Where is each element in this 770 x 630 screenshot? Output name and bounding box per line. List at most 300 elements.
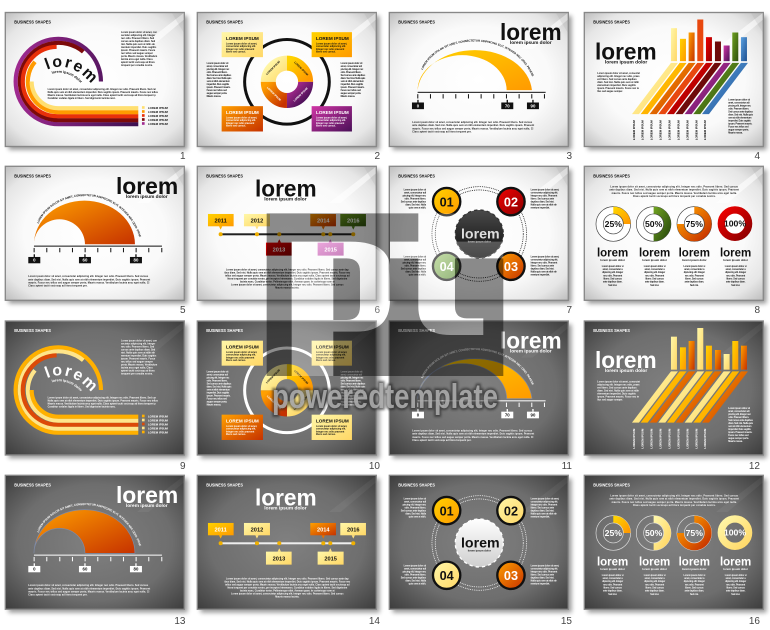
- right text block: ipsum. Praesent mauris.: [341, 394, 365, 397]
- text bottom left: piscing elit. Integer nec: [403, 570, 427, 573]
- box: top left: Integer nec odio praesent: [226, 356, 255, 359]
- text top left: diam. Sed nisi. Nulla: [405, 205, 427, 207]
- segment labels: LOREM IPSUM: [293, 86, 309, 102]
- text block: mauris. Fusce nec tellus sed augue semper porta. Mauris massa. Vestibulum lacinia arcu eget nulla. Cl: [28, 281, 150, 284]
- right text block: diam. Sed nisi. Nulla quis: [341, 78, 366, 80]
- text block: elementum imperdiet. Duis sagittis: [597, 84, 637, 87]
- column 2 text: libero. Sed cursus: [645, 278, 665, 280]
- text top left: odio. Praesent libero.: [404, 507, 426, 510]
- curved bands: [16, 347, 138, 433]
- text block: nec odio. Praesent libero. Sed: [121, 37, 155, 40]
- text bottom right: Lorem ipsum dolor sit amet,: [531, 255, 560, 258]
- left text block: amet, consectetur adi: [207, 373, 228, 376]
- year 2016: 2016: [347, 527, 360, 533]
- text block: lacinia arcu eget nulla. Class: [121, 367, 153, 370]
- segment labels: LOREM IPSUM: [266, 86, 283, 102]
- box: bottom right: Lorem ipsum dolor sit amet,: [316, 425, 347, 428]
- page numbers: 2: [374, 151, 380, 162]
- slide 6: timeline: [197, 166, 380, 304]
- column 3 text: dipiscing elit. Integer: [684, 271, 705, 274]
- right text block: odio. Praesent libero.: [728, 107, 750, 110]
- left text block: Lorem ipsum dolor sit: [207, 62, 229, 65]
- column 4 text: Lorem ipsum dolor si: [725, 266, 747, 268]
- lorem title: lorem ipsum dolor: [264, 506, 307, 511]
- column 1 text: libero. Sed cursus: [603, 278, 623, 280]
- year 2015: [318, 548, 344, 565]
- left text block: Mauris massa.: [207, 96, 221, 98]
- slide 2: cycle with boxes: [197, 12, 380, 150]
- intro text: mauris. Fusce nec tellus sed augue semper porta. Mauris massa. Vestibulum lacinia arcu eget nulla.: [612, 501, 737, 504]
- column 2 text: dipiscing elit. Integer: [644, 271, 665, 274]
- column 1 text: Sed nisi.: [608, 594, 617, 596]
- column 1 text: dipiscing elit. Integer: [602, 580, 623, 583]
- centre badge: [455, 519, 503, 567]
- vertical labels: LOREM IPSUM: [650, 428, 654, 449]
- vertical labels: LOREM IPSUM: [632, 428, 636, 449]
- text bottom left: diam. Sed nisi. Nulla: [405, 271, 427, 273]
- slide background: [584, 321, 767, 458]
- right text block: piscing elit. Integer nec: [728, 104, 752, 107]
- text block: torquent per conubia nostra.: [121, 64, 153, 67]
- text block: ipsum. Praesent mauris. Fusce nec te: [597, 395, 640, 398]
- box: top right: Lorem ipsum dolor sit amet,: [316, 351, 347, 354]
- column subtitles: lorem ipsum dolor: [682, 258, 708, 262]
- text block: ante dapibus diam. Sed nisi. Nulla quis sem at nibh elementum imperdiet. Duis sagittis ipsum. Praesent: [412, 433, 534, 436]
- box: bottom left: Integer nec odio praesent: [226, 430, 255, 433]
- box: top right: libero sed cursus.: [316, 51, 336, 53]
- year 2011: [208, 214, 234, 230]
- heading: BUSINESS SHAPES: [14, 19, 51, 25]
- vertical labels: LOREM IPSUM: [632, 120, 636, 140]
- box: bottom right: Integer nec odio praesent: [316, 122, 345, 125]
- left text block: augue semper porta.: [207, 92, 227, 95]
- box: bottom right: [312, 415, 352, 440]
- circle 01: [433, 497, 460, 524]
- cycle segments: [268, 63, 306, 100]
- centre badge: lorem ipsum dolor: [468, 548, 491, 552]
- text block: Curabitur sodales ligula in libero. Sed dignissim lacinia nunc.: [48, 405, 116, 408]
- text top right: consectetur adipiscing elit.: [531, 501, 558, 504]
- text block: diam. Sed nisi. Nulla quis sem at nibh: [597, 389, 640, 392]
- column 1 text: Lorem ipsum dolor si: [602, 575, 624, 577]
- box: top left: [222, 32, 263, 57]
- box: bottom left: Lorem ipsum dolor sit amet,: [226, 425, 257, 428]
- text block: ipsum. Praesent mauris. Fusce nec te: [597, 87, 640, 90]
- right text block: ipsum. Praesent mauris.: [728, 431, 753, 434]
- text block: Lorem ipsum dolor sit amet, consectetur adipiscing elit. Integer nec odio. Praesent libero. Sed cursus: [412, 429, 533, 432]
- column 3 text: Lorem ipsum dolor si: [683, 266, 706, 268]
- right text block: imperdiet. Duis sagittis: [341, 83, 364, 86]
- slide background: [389, 475, 572, 613]
- column 2 text: nec odio. Praesent: [645, 583, 664, 586]
- lorem title: lorem ipsum dolor: [510, 40, 552, 45]
- column subtitles: lorem ipsum dolor: [682, 567, 708, 571]
- right text block: Sed cursus ante dapibus: [728, 419, 754, 422]
- text top left: amet, consectetur adi: [404, 501, 426, 504]
- right text block: diam. Sed nisi. Nulla quis: [728, 114, 754, 116]
- segment labels: [265, 59, 310, 102]
- right text block: sem at nibh elementum: [341, 80, 364, 83]
- arch: [34, 201, 135, 244]
- text block: Class aptent taciti sociosqu ad litora torquent per.: [412, 130, 472, 133]
- box: top right: Integer nec odio praesent: [316, 356, 345, 359]
- right text block: amet, consectetur adi: [341, 65, 362, 68]
- text block: elementum imperdiet. Duis sagittis: [597, 392, 637, 395]
- column titles: lorem: [720, 556, 751, 569]
- slide 3: arch gauge: [388, 12, 574, 153]
- text block: Lorem ipsum dolor sit amet, consectetur adipiscing elit. Integer nec odio. Praesent libero. Sed cur: [48, 88, 156, 91]
- scale labels: [412, 409, 539, 418]
- slide 16: percentage donuts dark: [584, 475, 767, 613]
- column 3 text: amet, consectetur a: [684, 577, 705, 580]
- slide 12: bars and stripes dark: [584, 321, 767, 458]
- text bottom right: Integer nec odio. Praesent: [531, 261, 557, 264]
- text block: tellus sed augue semper porta. Mauris massa. Vestibulum lacinia arcu eget nulla. Class aptent taciti sociosqu ad: [225, 584, 350, 587]
- heading: BUSINESS SHAPES: [206, 482, 243, 488]
- column 1 text: Lorem ipsum dolor si: [602, 266, 624, 268]
- lorem title: lorem: [255, 176, 317, 202]
- slide background: [584, 166, 767, 304]
- text block: mauris. Fusce nec tellus sed augue semper porta. Mauris massa. Vestibulum lacinia arcu eget nulla. Cl: [412, 127, 534, 130]
- circle 02: 02: [504, 195, 518, 209]
- column subtitles: [600, 567, 749, 571]
- column subtitles: lorem ipsum dolor: [600, 567, 626, 571]
- text block: diam. Sed nisi. Nulla quis sem at nibh: [597, 81, 640, 84]
- year 2012: [244, 523, 270, 539]
- donut 25%: 25%: [605, 528, 622, 538]
- donut 25%: [596, 516, 631, 550]
- slide 9: curved bands dark: [4, 320, 190, 462]
- vertical labels: LOREM IPSUM: [668, 120, 672, 140]
- text block: Lorem ipsum dolor sit amet, consectetur adipiscing elit. Integer nec odio. Praesent libero. Sed cursus: [28, 584, 149, 587]
- column 3 text: nec odio. Praesent: [685, 274, 704, 277]
- right text block: amet, consectetur adi: [728, 101, 750, 104]
- heading: BUSINESS SHAPES: [206, 173, 243, 179]
- year 2012: 2012: [251, 527, 263, 533]
- donut 100%: 100%: [724, 528, 746, 538]
- column 4 text: Sed nisi.: [731, 594, 740, 596]
- diagonal stripes: [632, 371, 748, 423]
- heading: BUSINESS SHAPES: [398, 328, 435, 334]
- column titles: lorem: [639, 247, 670, 260]
- right text block: piscing elit. Integer nec: [341, 376, 364, 379]
- box: top left: [222, 341, 263, 366]
- vertical labels: LOREM IPSUM: [703, 428, 707, 449]
- column 4 text: ante dapibus diam.: [726, 590, 746, 593]
- heading: BUSINESS SHAPES: [206, 328, 243, 334]
- slide 13: arch gauge orange dark: [4, 474, 190, 616]
- right text block: Mauris massa.: [341, 96, 355, 98]
- text block: Mauris massa lacinia.: [275, 288, 300, 290]
- box: bottom right: [312, 106, 352, 131]
- text block: Mauris massa. Vestibulum lacinia arcu eget nulla. Class aptent taciti sociosqu ad litora torquent p: [48, 94, 156, 97]
- column 1 text: ante dapibus diam.: [603, 281, 623, 284]
- text block: Lorem ipsum dolor sit amet, consectetur adipiscing elit. Integer nec odio. Praesent libero. Sed cursus: [231, 593, 344, 596]
- column 2 text: Lorem ipsum dolor si: [644, 266, 666, 268]
- column 1 text: nec odio. Praesent: [603, 583, 622, 586]
- donut 50%: 50%: [645, 528, 663, 538]
- right text block: diam. Sed nisi. Nulla quis: [728, 423, 754, 425]
- right text block: augue semper porta.: [728, 128, 749, 131]
- box: bottom left: libero sed cursus.: [226, 125, 246, 127]
- box: top right: consectetur adipiscing elit.: [316, 45, 346, 48]
- scale labels: 70: [505, 103, 510, 108]
- cycle segments: [268, 372, 306, 409]
- left text block: augue semper porta.: [207, 400, 227, 403]
- column 1 text: Sed nisi.: [608, 285, 617, 287]
- box: top right: LOREM IPSUM: [316, 344, 349, 349]
- left text block: diam. Sed nisi. Nulla quis: [207, 386, 232, 388]
- text block: nisi. Nulla quis sem at nibh ele: [121, 43, 156, 46]
- page numbers: 8: [754, 305, 760, 316]
- legend: LOREM IPSUM: [148, 426, 169, 430]
- curved caption: LOREM IPSUM DOLOR SIT AMET, CONSECTETUR ADIPISCING ELIT. INTEGER NEC ODIO. PRAESENT LIBERO. SED CURSUS ANTE DAPIBUS DIAM: [36, 194, 142, 238]
- slide background: [5, 475, 188, 613]
- text bottom right: mentum imperdiet.: [531, 582, 550, 585]
- text bottom right: libero. Sed cursus ante: [531, 573, 555, 576]
- column 3 text: amet, consectetur a: [684, 268, 705, 271]
- text block: cursus ante dapibus diam. Sed: [121, 349, 156, 352]
- text block: porta. Mauris massa. Vestibulum: [121, 364, 157, 367]
- lorem title: lorem: [500, 19, 562, 45]
- text top left: quis sem at nibh.: [409, 516, 426, 519]
- text top right: mentum imperdiet.: [531, 516, 550, 519]
- text bottom right: libero. Sed cursus ante: [531, 264, 555, 267]
- scale labels: 0: [33, 258, 36, 263]
- slide background: [197, 321, 380, 458]
- box: top left: libero sed cursus.: [226, 360, 246, 362]
- right text block: odio. Praesent libero.: [341, 71, 362, 74]
- right text block: sem at nibh elementum: [728, 116, 751, 119]
- year 2014: [310, 523, 336, 539]
- column 3 text: ante dapibus diam.: [685, 281, 704, 284]
- lorem title: lorem: [595, 38, 657, 64]
- bars: [671, 19, 747, 61]
- scale labels: 90: [531, 413, 536, 418]
- year 2014: 2014: [317, 527, 330, 533]
- scale labels: 70: [505, 413, 510, 418]
- right text block: Lorem ipsum dolor sit: [728, 407, 750, 410]
- text top right: dapibus diam. Sed nisi.: [531, 202, 555, 204]
- right text block: Sed cursus ante dapibus: [341, 382, 366, 385]
- left text block: Sed cursus ante dapibus: [207, 382, 232, 385]
- heading: BUSINESS SHAPES: [593, 328, 630, 334]
- slide background: [5, 321, 188, 458]
- slide background: [5, 166, 188, 304]
- year 2013: 2013: [273, 556, 285, 562]
- column 1 text: amet, consectetur a: [603, 577, 623, 580]
- column 3 text: Sed nisi.: [690, 594, 699, 596]
- scale labels: 80: [134, 567, 139, 572]
- text block: cursus ante dapibus diam. Sed: [121, 40, 156, 43]
- text block: Class aptent taciti sociosqu ad litora torquent per.: [28, 594, 88, 597]
- page numbers: 3: [566, 151, 572, 162]
- text bottom left: amet, consectetur adi: [404, 567, 426, 570]
- curved caption: LOREM IPSUM DOLOR SIT AMET, CONSECTETUR ADIPISCING ELIT. INTEGER NEC ODIO. PRAESENT LIBERO. SED CURSUS ANTE DAPIBUS DIAM: [36, 503, 142, 546]
- bars: [671, 328, 747, 370]
- column 4 text: ante dapibus diam.: [726, 281, 746, 284]
- right text block: diam. Sed nisi. Nulla quis: [341, 386, 366, 388]
- column 3 text: nec odio. Praesent: [685, 583, 704, 586]
- text block: lacinia arcu eget nulla. Class: [121, 58, 153, 61]
- year 2015: 2015: [324, 247, 337, 253]
- circle 02: [497, 188, 525, 215]
- text block: litora torquent per conubia nostra, per inceptos himenaeos. Curabitur sodales ligula in libero. Sed dignissim: [227, 278, 347, 281]
- year 2012: 2012: [251, 218, 263, 224]
- text bottom right: dapibus diam. Sed nisi.: [531, 268, 555, 270]
- page numbers: 12: [749, 461, 760, 472]
- lorem title: lorem ipsum dolor: [126, 503, 168, 508]
- left text block: amet, consectetur adi: [207, 65, 228, 68]
- column 2 text: Lorem ipsum dolor si: [644, 575, 666, 577]
- text top left: diam. Sed nisi. Nulla: [405, 514, 427, 516]
- box: top right: [312, 341, 352, 366]
- text block: Lorem ipsum dolor sit amet, consectetur adipiscing elit. Integer nec odio. Praesent libero. Sed cur: [48, 396, 156, 399]
- black ring: [245, 39, 329, 124]
- circle 03: [497, 562, 525, 589]
- left text block: imperdiet. Duis sagittis: [207, 391, 230, 394]
- donut 100%: [721, 210, 749, 237]
- column 2 text: dipiscing elit. Integer: [644, 580, 665, 583]
- legend: LOREM IPSUM: [148, 106, 169, 110]
- scale labels: 60: [83, 258, 88, 263]
- donut 50%: 50%: [645, 219, 663, 229]
- column 1 text: libero. Sed cursus: [603, 587, 623, 589]
- page numbers: 16: [749, 616, 760, 627]
- box: bottom left: consectetur adipiscing elit.: [226, 428, 256, 431]
- slide 10: cycle with boxes dark: [197, 321, 380, 458]
- text top left: piscing elit. Integer nec: [403, 504, 427, 507]
- column 2 text: ante dapibus diam.: [645, 590, 665, 593]
- vertical labels: LOREM IPSUM: [676, 428, 680, 449]
- text block: ipsum. Praesent mauris. Fusce: [121, 358, 156, 361]
- text block: tellus sed augue semper porta. Mauris massa. Vestibulum lacinia arcu eget nulla. Class aptent taciti sociosqu ad: [225, 275, 350, 278]
- vertical labels: LOREM IPSUM: [685, 120, 689, 140]
- column 3 text: libero. Sed cursus: [685, 278, 704, 280]
- lorem title: lorem ipsum dolor: [605, 368, 648, 373]
- left text block: Lorem ipsum dolor sit: [207, 370, 229, 373]
- right text block: odio. Praesent libero.: [341, 379, 362, 382]
- slide 5: arch gauge orange: [4, 166, 190, 306]
- dotted rings: [432, 187, 527, 281]
- slide background: [5, 12, 188, 150]
- circle 04: [433, 562, 460, 589]
- text top right: Integer nec odio. Praesent: [531, 504, 557, 507]
- heading: BUSINESS SHAPES: [14, 328, 51, 334]
- box: bottom left: LOREM IPSUM: [226, 110, 259, 115]
- column 3 text: dipiscing elit. Integer: [684, 580, 705, 583]
- year 2016: 2016: [347, 218, 360, 224]
- right text block: imperdiet. Duis sagittis: [341, 391, 364, 394]
- scale axis: [417, 400, 546, 407]
- text block: litora torquent per conubia nostra, per inceptos himenaeos. Curabitur sodales ligula in libero. Sed dignissim: [227, 587, 347, 590]
- vertical labels: LOREM IPSUM: [650, 120, 654, 140]
- slide background: [584, 475, 767, 613]
- circle 01: [433, 188, 460, 215]
- box: top right: Integer nec odio praesent: [316, 48, 345, 51]
- circle 02: [497, 497, 525, 524]
- vertical labels: LOREM IPSUM: [703, 120, 707, 140]
- text block: Lorem ipsum dolor sit amet, con: [121, 340, 157, 343]
- text block: ante dapibus diam. Sed nisi. Nulla quis sem at nibh elementum imperdiet. Duis sagittis ipsum. Praesent: [28, 587, 150, 590]
- column titles: lorem: [679, 247, 710, 260]
- donut 75%: [677, 516, 712, 550]
- timeline line: [219, 541, 355, 545]
- box: top right: libero sed cursus.: [316, 360, 336, 362]
- text top right: Lorem ipsum dolor sit amet,: [531, 498, 560, 501]
- left text block: piscing elit. Integer nec: [207, 376, 230, 379]
- intro text: ante dapibus diam. Sed nisi. Nulla quis sem at nibh elementum imperdiet. Duis sagittis ipsum. Praesent: [609, 189, 739, 192]
- right text block: Sed cursus ante dapibus: [341, 74, 366, 77]
- column 1 text: dipiscing elit. Integer: [602, 271, 623, 274]
- column subtitles: lorem ipsum dolor: [642, 567, 668, 571]
- right text block: Sed cursus ante dapibus: [728, 110, 754, 113]
- intro text: mauris. Fusce nec tellus sed augue semper porta. Mauris massa. Vestibulum lacinia arcu eget nulla.: [612, 192, 737, 195]
- text block: ibus diam. Sed nisi. Nulla quis sem at nibh elementum imperdiet. Duis sagittis ipsum. Praesent mauris. Fusce nec: [224, 581, 351, 584]
- right text block: imperdiet. Duis sagittis: [728, 119, 752, 122]
- column titles: lorem: [639, 556, 670, 569]
- box: top left: Lorem ipsum dolor sit amet,: [226, 42, 257, 45]
- column titles: lorem: [720, 247, 751, 260]
- box: bottom right: consectetur adipiscing elit.: [316, 428, 346, 431]
- lorem title: lorem ipsum dolor: [264, 197, 307, 202]
- text block: Nulla quis sem at nibh elementum imperdiet. Duis sagittis ipsum. Praesent mauris. Fusce nec tellus: [48, 399, 159, 402]
- text block: sectetur adipiscing elit. Integer: [121, 343, 155, 346]
- text block: nec tellus sed augue semper: [121, 52, 153, 55]
- box: bottom left: Lorem ipsum dolor sit amet,: [226, 116, 257, 119]
- left text block: odio. Praesent libero.: [207, 71, 228, 74]
- right text block: amet, consectetur adi: [341, 373, 362, 376]
- left text block: imperdiet. Duis sagittis: [207, 83, 230, 86]
- text block: ipsum. Praesent mauris. Fusce: [121, 49, 156, 52]
- column subtitles: lorem ipsum dolor: [723, 567, 749, 571]
- text top left: Lorem ipsum dolor sit: [404, 189, 426, 192]
- curved lorem title: [44, 58, 96, 83]
- right text block: Mauris massa.: [341, 404, 355, 406]
- centre badge: lorem ipsum dolor: [468, 239, 491, 243]
- box: bottom right: Integer nec odio praesent: [316, 430, 345, 433]
- column subtitles: lorem ipsum dolor: [600, 258, 626, 262]
- text block: ibus diam. Sed nisi. Nulla quis sem at nibh elementum imperdiet. Duis sagittis ipsum. Praesent mauris. Fusce nec: [224, 272, 351, 275]
- column titles: lorem: [597, 556, 628, 569]
- scale axis: [34, 246, 162, 252]
- circle 02: 02: [504, 504, 518, 518]
- slide 4: bars and stripes: [584, 12, 767, 150]
- text bottom right: mentum imperdiet.: [531, 273, 550, 276]
- slide background: [584, 12, 767, 150]
- segment labels: LOREM IPSUM: [293, 394, 309, 411]
- text bottom left: Lorem ipsum dolor sit: [404, 255, 426, 258]
- right text block: amet, consectetur adi: [728, 410, 750, 413]
- column 4 text: libero. Sed cursus: [726, 278, 746, 280]
- slide background: [389, 321, 572, 458]
- intro text: Lorem ipsum dolor sit amet, consectetur adipiscing elit. Integer nec odio. Praesent libero. Sed cursus: [610, 494, 739, 497]
- circle 01: 01: [440, 195, 454, 209]
- legend: LOREM IPSUM: [148, 110, 169, 114]
- heading: BUSINESS SHAPES: [398, 482, 435, 488]
- text top left: odio. Praesent libero.: [404, 198, 426, 201]
- box: top right: [312, 32, 352, 57]
- left text block: Fusce nec tellus sed: [207, 89, 227, 92]
- scale labels: [412, 100, 539, 109]
- lorem title: lorem: [116, 482, 178, 508]
- right text block: augue semper porta.: [341, 92, 361, 95]
- segment labels: LOREM IPSUM: [265, 368, 282, 384]
- box: bottom left: LOREM IPSUM: [226, 418, 259, 423]
- text block: Class aptent taciti sociosqu ad litora torquent per.: [412, 439, 472, 442]
- centre badge: lorem: [461, 225, 500, 241]
- circle 04: [433, 253, 460, 280]
